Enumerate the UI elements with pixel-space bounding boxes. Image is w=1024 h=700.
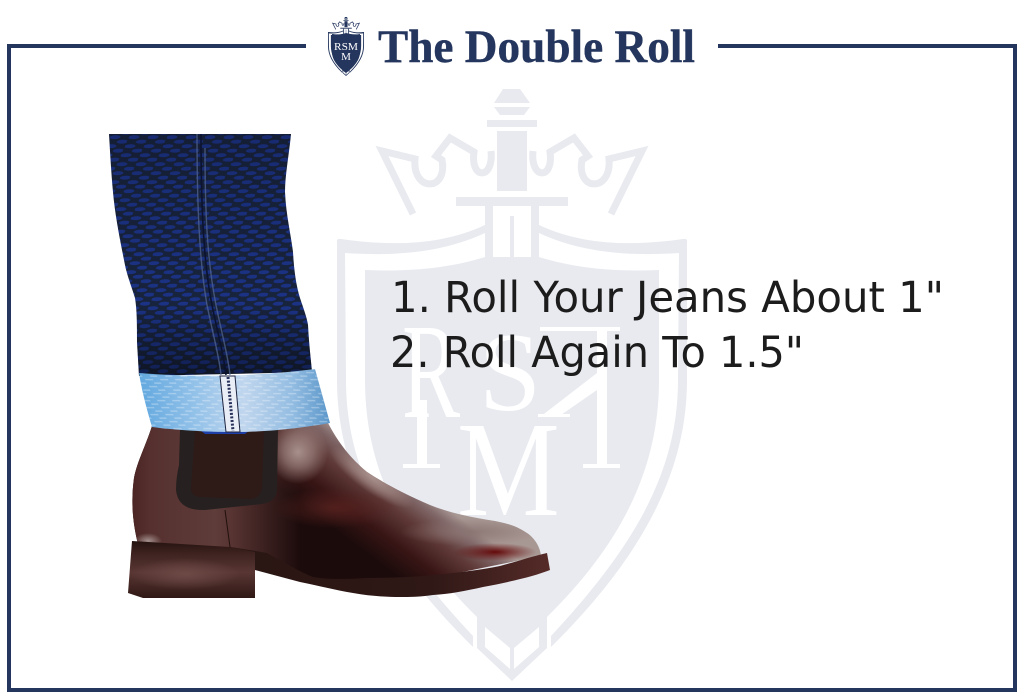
header logo: monogram [334, 41, 358, 63]
toe red reflection [459, 544, 534, 560]
jeans leg [109, 134, 330, 434]
title: The Double Roll [378, 21, 695, 73]
watermark: monogram: S [479, 311, 541, 435]
header logo: monogram: RSM [334, 41, 358, 53]
left quarter shading [132, 426, 290, 566]
jeans centre seam [201, 134, 226, 375]
watermark: monogram: M [457, 395, 560, 545]
boot sole and heel [128, 541, 550, 598]
heel counter highlight [136, 534, 161, 542]
header logo: monogram: M [341, 51, 351, 63]
boot seam [225, 510, 230, 547]
boot upper leather [132, 423, 541, 579]
elastic gusset inner [191, 430, 264, 499]
vamp edge highlight [334, 450, 408, 505]
header logo: filled shield [332, 33, 360, 73]
instructions text [390, 273, 944, 378]
watermark: crest emblem [337, 89, 687, 681]
step 2: 2. Roll Again To 1.5" [390, 328, 804, 378]
boot illustration [120, 420, 550, 598]
mid vamp warm tone [286, 494, 366, 524]
jeans denim [109, 134, 312, 376]
step 1: 1. Roll Your Jeans About 1" [391, 273, 944, 323]
header logo [328, 17, 364, 76]
rolled cuff [139, 369, 330, 432]
watermark: monogram: R [402, 296, 460, 447]
elastic gusset outer [176, 430, 278, 510]
toe highlight [409, 522, 524, 542]
watermark: monogram [402, 296, 620, 545]
denim sliver under cuff [200, 430, 250, 434]
ankle highlight [278, 426, 326, 482]
cuff selvedge stitching [220, 376, 240, 432]
